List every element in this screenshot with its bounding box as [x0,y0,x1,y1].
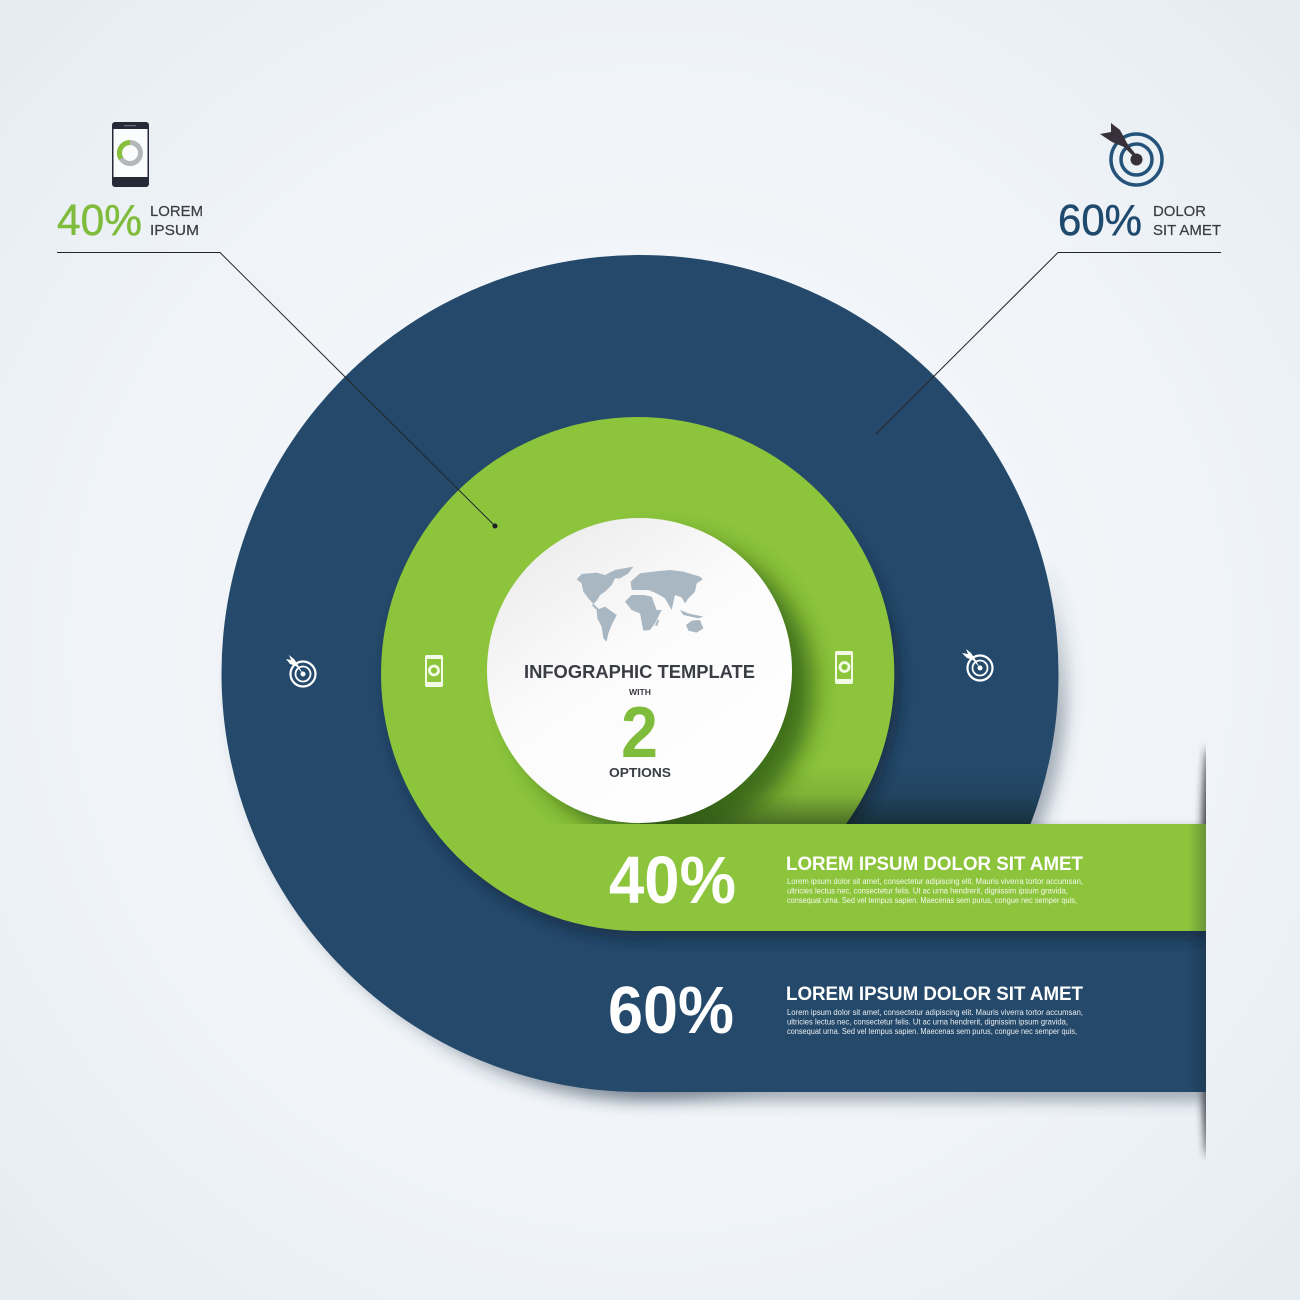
green ring and band [381,417,1206,931]
shadow of white disc on green ring [511,537,813,839]
shadow above green band on ring [640,779,1041,824]
fold shading on bands [1188,824,1206,1092]
panel: navy band text: LOREM IPSUM DOLOR SIT AMET [786,984,1083,1005]
center title: INFOGRAPHIC TEMPLATE [524,661,755,682]
icon: smartphone with donut [112,122,149,187]
navy ring shadow on background [222,575,1078,1108]
navy ring and band [222,255,1206,1092]
panel: navy band text: 60% [608,973,734,1048]
panel: green band text: consequat urna. Sed vel tempus sapien. Maecenas sem purus, congue nec semper quis, [787,896,1077,905]
stat: 40% lorem ipsum [57,196,203,245]
icon: target on navy left [286,655,316,686]
panel: navy band text: consequat urna. Sed vel tempus sapien. Maecenas sem purus, congue nec semper quis, [787,1027,1077,1036]
panel: green band text: Lorem ipsum dolor sit amet, consectetur adipiscing elit. Mauris viverra tortor accumsan, [787,877,1083,886]
center with label: WITH [629,687,651,697]
panel: navy band text: ultricies lectus nec, consectetur felis. Ut ac urna hendrerit, dignissim ipsum gravida, [787,1018,1068,1026]
stat: 60% dolor sit amet [1058,196,1221,245]
navy band shadow on background [465,1054,1206,1112]
world map [577,567,703,642]
icon: phone on green right [835,651,853,684]
panel: green band text: ultricies lectus nec, consectetur felis. Ut ac urna hendrerit, dignissim ipsum gravida, [787,886,1068,896]
panel: green band text: 40% [609,843,736,918]
stat: 60% dolor sit amet: 60% [1058,196,1142,245]
stat: 60% dolor sit amet: SIT AMET [1153,222,1221,239]
center disc [487,518,792,823]
panel: navy band text [608,973,1083,1048]
shadow of green shape on navy [382,556,1206,945]
stat: 40% lorem ipsum: IPSUM [150,222,199,239]
stat: 40% lorem ipsum: 40% [57,196,142,245]
panel: green band text [609,843,1083,918]
stat: 60% dolor sit amet: DOLOR [1153,203,1206,220]
icon: phone on green left [425,655,443,687]
leader line: navy [876,252,1221,434]
leader line: green [57,252,498,528]
panel: green band text: LOREM IPSUM DOLOR SIT AMET [786,854,1083,875]
right edge fold shadow [1195,744,1206,1160]
icon: dart target [1100,123,1162,185]
panel: navy band text: Lorem ipsum dolor sit amet, consectetur adipiscing elit. Mauris viverra tortor accumsan, [787,1008,1083,1017]
center number: 2 [621,693,658,773]
icon: target on navy right [962,649,992,680]
stat: 40% lorem ipsum: LOREM [150,203,203,220]
center options label: OPTIONS [609,765,671,780]
